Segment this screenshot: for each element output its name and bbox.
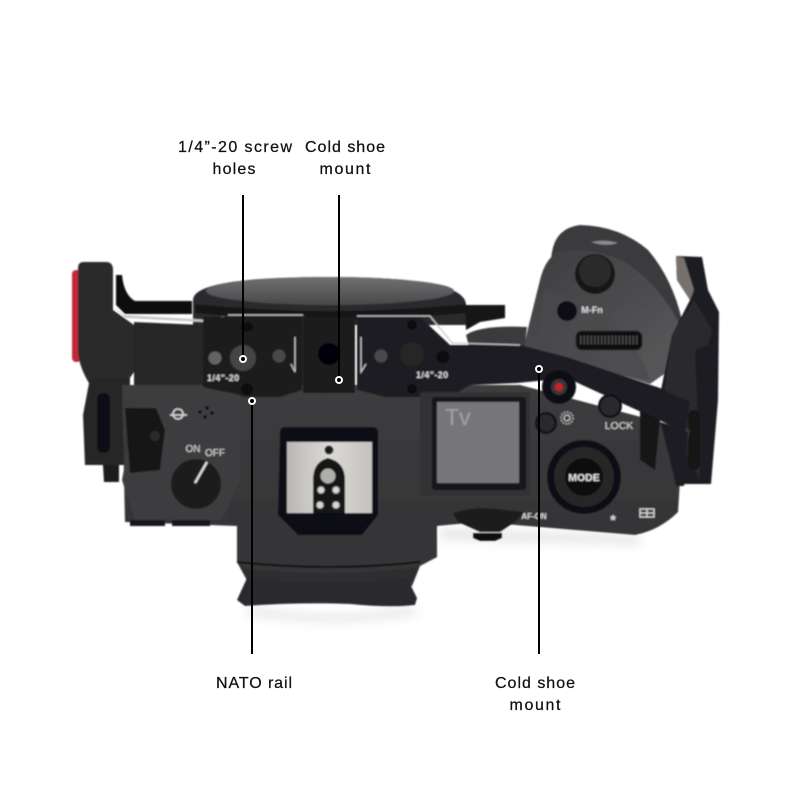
engraved label: 1/4"-20 — [416, 370, 449, 380]
left strap lug — [72, 262, 228, 482]
label: cold shoe mount top: Cold shoe — [305, 139, 385, 156]
lock button: LOCK — [605, 420, 633, 432]
top LCD panel: Tv — [445, 404, 471, 430]
M-Fn button: M-Fn — [581, 305, 603, 315]
right L-bracket — [660, 256, 719, 484]
leader: NATO rail — [249, 398, 255, 654]
icon: drive mode — [640, 509, 654, 517]
shadow under camera — [245, 528, 640, 622]
leader: cold shoe top — [336, 195, 342, 383]
front buttons — [453, 508, 525, 532]
mode dial — [547, 440, 621, 514]
label: cold shoe mount bottom: mount — [510, 697, 561, 714]
record button — [542, 370, 576, 404]
on/off dial area: ON — [186, 444, 200, 455]
control wheel — [576, 331, 642, 350]
lock button — [598, 394, 633, 432]
eyecup — [237, 578, 417, 606]
top bracket plates — [134, 315, 690, 432]
screw holes — [230, 345, 256, 371]
bottom icons: * — [610, 512, 616, 529]
on/off dial area: OFF — [205, 448, 225, 459]
engraved label: 1/4"-20 — [207, 373, 240, 383]
M-Fn button — [557, 301, 603, 321]
leader: screw holes — [240, 195, 246, 362]
viewfinder housing — [237, 520, 437, 585]
hot shoe — [278, 427, 378, 535]
illumination button — [535, 412, 573, 434]
label: cold shoe mount bottom: Cold shoe — [495, 675, 575, 692]
camera photo — [72, 225, 719, 622]
label: screw holes: 1/4”-20 screw — [178, 139, 292, 156]
camera body — [122, 385, 690, 586]
hot shoe rear cover piece — [465, 305, 505, 330]
on/off dial area — [122, 388, 240, 526]
label: cold shoe mount top: mount — [320, 161, 371, 178]
AF-ON label: AF-ON — [521, 512, 547, 521]
strap lug slot on the right — [640, 410, 660, 470]
grip — [524, 225, 682, 384]
label: screw holes: holes — [212, 161, 256, 178]
mode dial: MODE — [568, 472, 600, 484]
lens mount cap — [193, 277, 466, 325]
label: NATO rail: NATO rail — [216, 675, 292, 692]
shutter button — [575, 254, 615, 294]
top LCD panel — [420, 392, 530, 496]
leader: cold shoe right — [536, 366, 542, 654]
